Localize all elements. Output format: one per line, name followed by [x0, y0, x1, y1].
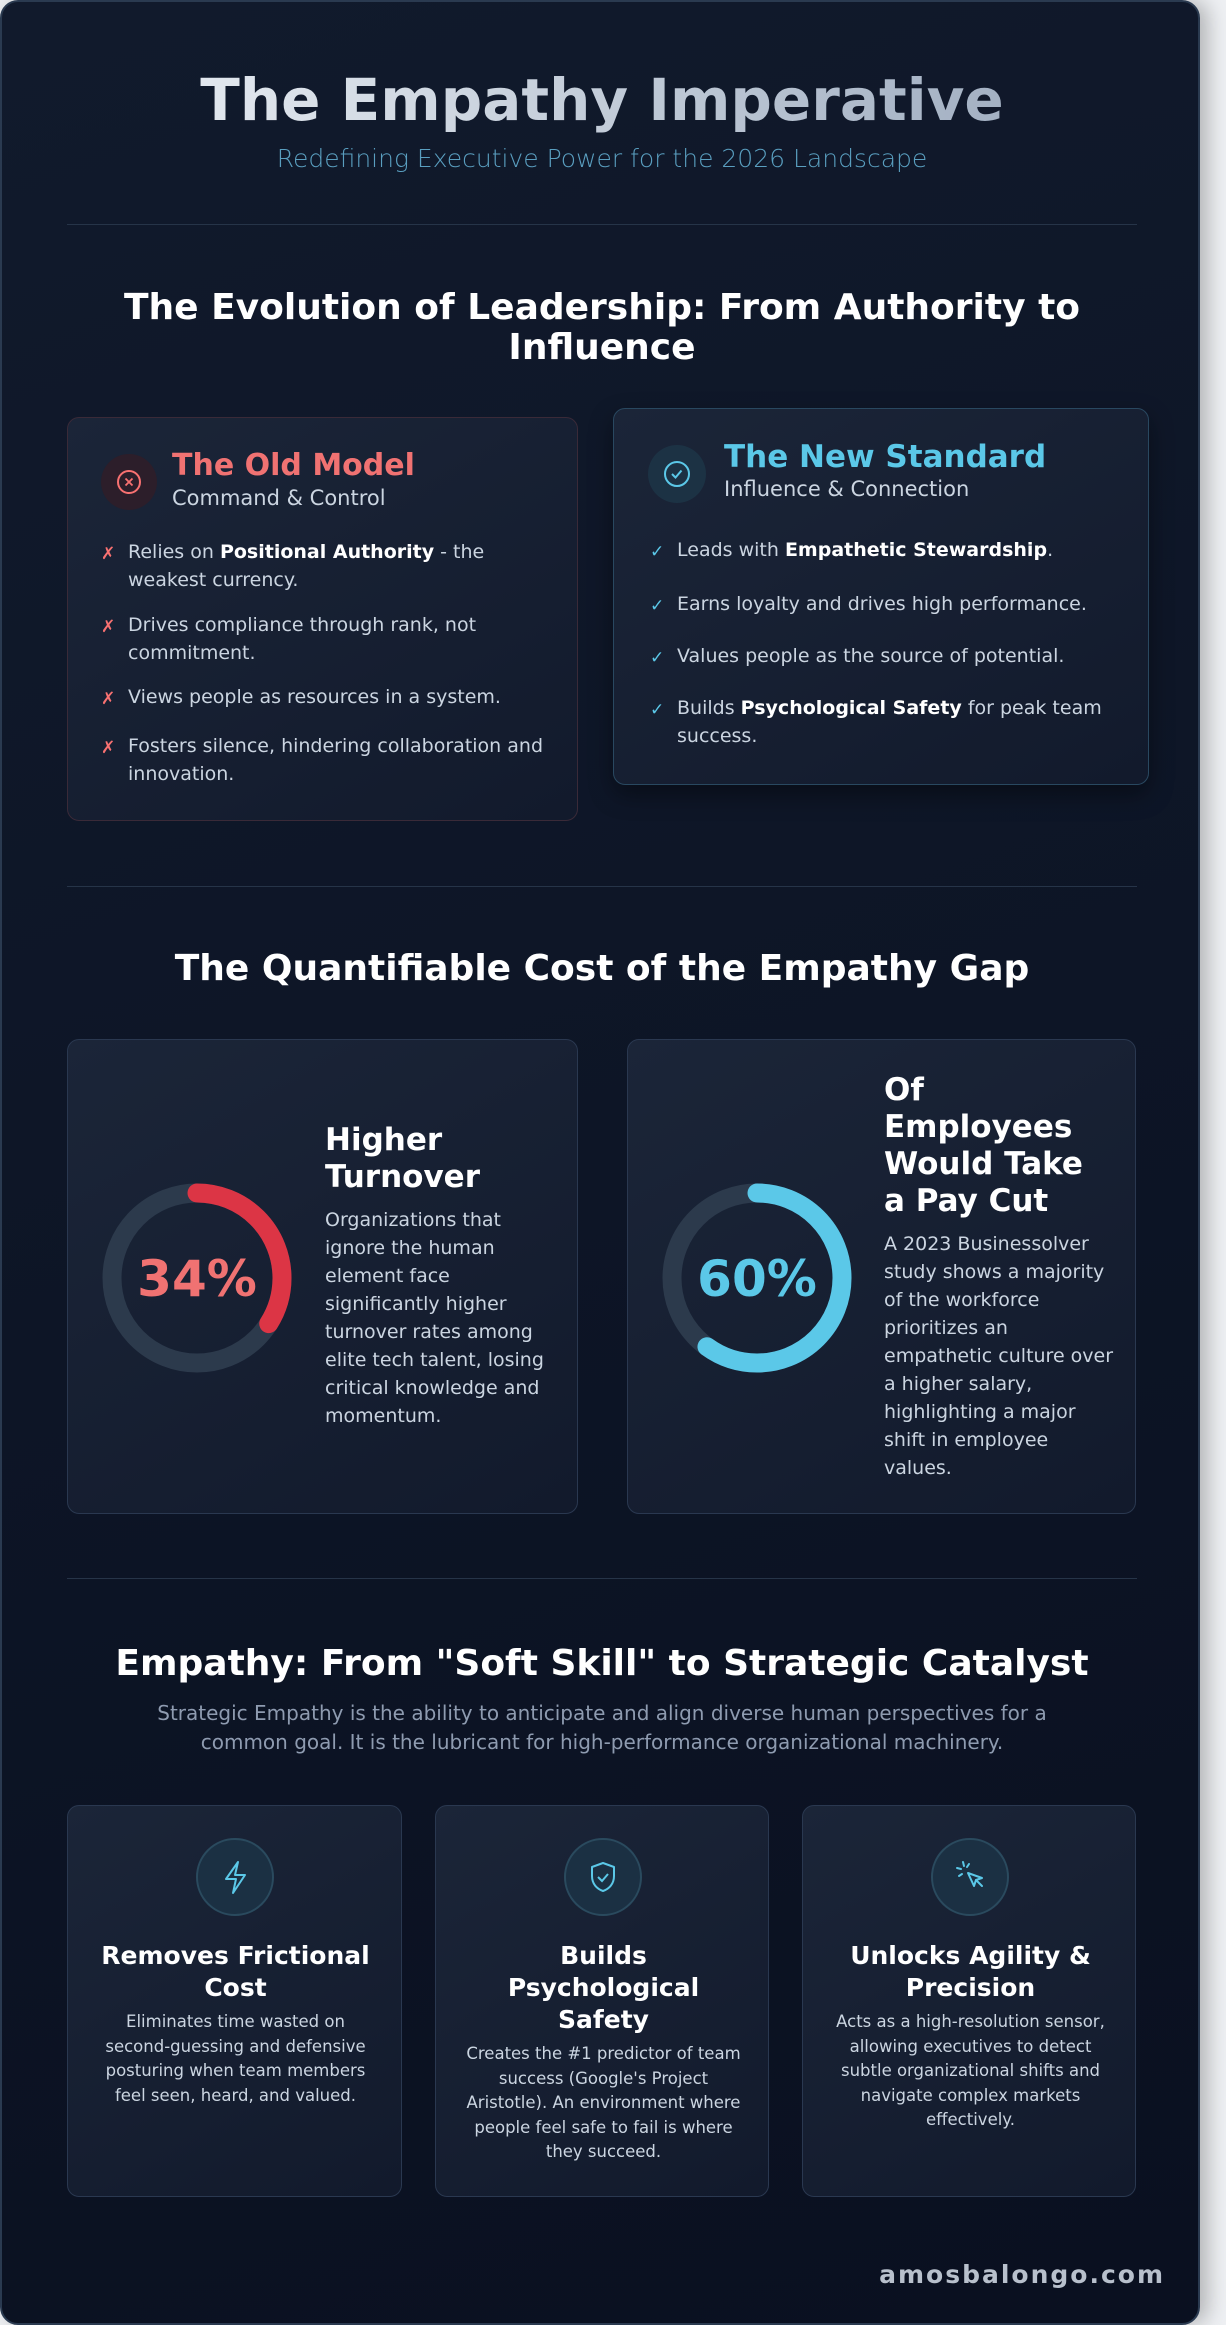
heading: evolution: The Evolution of Leadership: From Authority to [124, 287, 1080, 328]
intro text: Strategic Empathy is the ability to anticipate and align diverse human perspectives for a common goal. It is the lubricant for high-performance organizational machinery. [157, 1701, 1047, 1754]
stat title [884, 1072, 1083, 1219]
panel: safety [435, 1805, 769, 2197]
stat title: Turnover [325, 1159, 480, 1195]
subtitle: Redefining Executive Power for the 2026 Landscape [277, 144, 927, 173]
panel: old model: ✗ [101, 544, 115, 564]
icon: check circle [648, 445, 706, 503]
footer: brand: amosbalongo.com [879, 2260, 1165, 2289]
stat title: Of [884, 1072, 924, 1108]
title [2, 60, 1202, 140]
panel: friction [67, 1805, 402, 2197]
panel: new standard: ✓ [650, 596, 664, 616]
stat title: Would Take [884, 1146, 1083, 1182]
icon: shield [564, 1838, 642, 1916]
stat body: A 2023 Businessolver study shows a majority of the workforce prioritizes an empathetic culture over a higher salary, highlighting a major shift in employee values. [884, 1233, 1113, 1479]
safety text [466, 1941, 741, 2161]
old model heading: Command & Control [172, 486, 386, 510]
heading: evolution: Influence [508, 327, 696, 368]
panel: agility [802, 1805, 1136, 2197]
new standard heading: The New Standard [724, 439, 1046, 475]
new standard heading: Influence & Connection [724, 477, 969, 501]
panel: new standard [613, 408, 1149, 785]
heading: catalyst: Empathy: From "Soft Skill" to Strategic Catalyst [115, 1643, 1089, 1684]
panel: new standard: Earns loyalty and drives high performance. [677, 593, 1087, 615]
stat body: Organizations that ignore the human element face significantly higher turnover rates among elite tech talent, losing critical knowledge and momentum. [325, 1209, 544, 1427]
panel: new standard: Leads with Empathetic Stewardship. [677, 539, 1053, 561]
heading: evolution [124, 287, 1080, 368]
safety text: Builds Psychological Safety [508, 1941, 699, 2034]
donut chart 60%: 60% [697, 1250, 817, 1308]
panel: old model: Fosters silence, hindering collaboration and innovation. [128, 735, 543, 785]
agility text [836, 1941, 1105, 2129]
panel: old model: ✗ [101, 617, 115, 637]
friction text: Eliminates time wasted on second-guessing and defensive posturing when team members feel seen, heard, and valued. [105, 2012, 366, 2104]
agility text: Acts as a high-resolution sensor, allowing executives to detect subtle organizational shifts and navigate complex markets effectively. [836, 2012, 1105, 2129]
donut chart 34% [102, 1184, 292, 1372]
old model heading: The Old Model [172, 448, 415, 483]
panel: old model [67, 417, 578, 821]
donut chart 60% [662, 1184, 852, 1372]
donut chart 34%: 34% [137, 1250, 257, 1308]
new standard heading [724, 439, 1046, 501]
icon: lightning [196, 1838, 274, 1916]
old model heading [172, 448, 415, 510]
new bullets [650, 539, 1102, 747]
panel: old model: ✗ [101, 689, 115, 709]
panel: new standard: ✓ [650, 700, 664, 720]
agility text: Unlocks Agility & Precision [850, 1941, 1091, 2002]
panel: new standard: Builds Psychological Safety for peak team success. [677, 697, 1102, 747]
title: The Empathy Imperative [200, 66, 1004, 134]
stat title: Higher [325, 1122, 442, 1158]
panel: old model: ✗ [101, 738, 115, 758]
safety text: Creates the #1 predictor of team success (Google's Project Aristotle). An environment where people feel safe to fail is where they succeed. [466, 2044, 741, 2161]
panel: new standard: ✓ [650, 648, 664, 668]
panel: new standard: Values people as the source of potential. [677, 645, 1064, 667]
stat title: Employees [884, 1109, 1072, 1145]
panel: stat 34% [67, 1039, 578, 1514]
friction text [101, 1941, 370, 2104]
icon: x circle [101, 454, 157, 510]
panel: old model: Drives compliance through rank, not commitment. [128, 614, 476, 664]
panel: old model: Views people as resources in a system. [128, 686, 501, 708]
panel: old model: Relies on Positional Authority - the weakest currency. [128, 541, 484, 591]
stat title [325, 1122, 480, 1195]
panel: new standard: ✓ [650, 542, 664, 562]
old bullets [101, 541, 543, 785]
stat title: a Pay Cut [884, 1183, 1048, 1219]
friction text: Removes Frictional Cost [101, 1941, 370, 2002]
icon: cursor click [931, 1838, 1009, 1916]
heading: cost: The Quantifiable Cost of the Empathy Gap [175, 948, 1029, 989]
panel: stat 60% [627, 1039, 1136, 1514]
